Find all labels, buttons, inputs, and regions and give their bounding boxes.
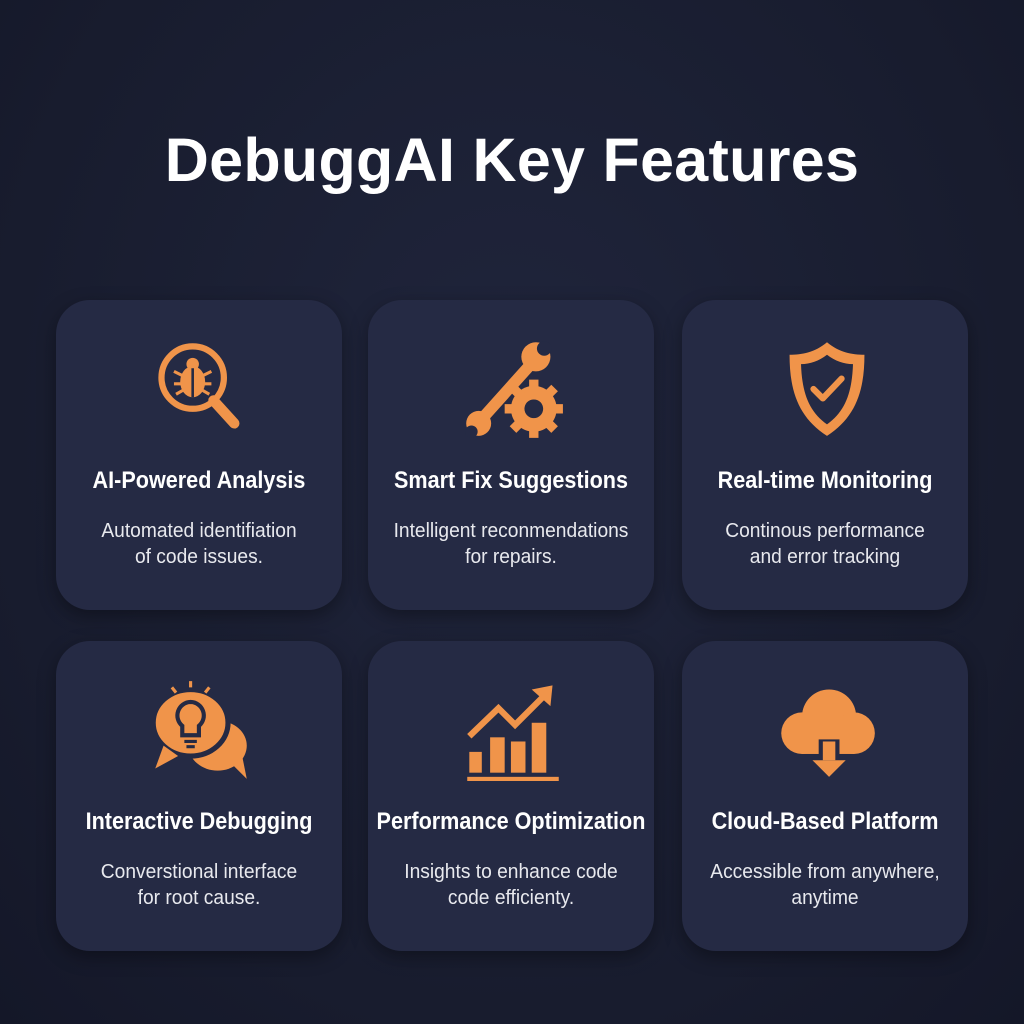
- heading: Smart Fix Suggestions: [394, 467, 628, 494]
- heading: Interactive Debugging: [86, 808, 312, 835]
- icon: wrench and gear: [466, 342, 563, 438]
- icon: shield check: [790, 342, 864, 436]
- panel: Interactive Debugging: [56, 641, 342, 951]
- heading: Performance Optimization: [377, 808, 645, 835]
- title: DebuggAI Key Features: [165, 126, 859, 194]
- icon: chat bulb: [155, 681, 247, 779]
- text: anytime: [791, 887, 859, 909]
- text: Automated identifiation: [101, 520, 297, 542]
- text: Converstional interface: [101, 861, 297, 883]
- text: [394, 520, 628, 568]
- panel: AI-Powered Analysis: [56, 300, 342, 610]
- text: [710, 861, 940, 909]
- text: code efficienty.: [448, 887, 574, 909]
- text: Accessible from anywhere,: [710, 861, 940, 883]
- icon: cloud download: [781, 690, 875, 777]
- panel: Smart Fix Suggestions: [368, 300, 654, 610]
- panel: Performance Optimization: [368, 641, 654, 951]
- icon: magnifier bug: [158, 343, 240, 428]
- heading: Cloud-Based Platform: [712, 808, 938, 835]
- panel: Real-time Monitoring: [682, 300, 968, 610]
- icon: growth chart: [467, 685, 559, 781]
- text: [725, 520, 925, 568]
- heading: AI-Powered Analysis: [93, 467, 305, 494]
- text: [404, 861, 618, 909]
- text: for root cause.: [138, 887, 260, 909]
- heading: Real-time Monitoring: [718, 467, 932, 494]
- text: for repairs.: [465, 546, 557, 568]
- panel: Cloud-Based Platform: [682, 641, 968, 951]
- text: Intelligent reconmendations: [394, 520, 628, 542]
- text: [101, 861, 297, 909]
- text: [101, 520, 297, 568]
- text: and error tracking: [750, 546, 900, 568]
- text: of code issues.: [135, 546, 263, 568]
- text: Continous performance: [725, 520, 925, 542]
- text: Insights to enhance code: [404, 861, 618, 883]
